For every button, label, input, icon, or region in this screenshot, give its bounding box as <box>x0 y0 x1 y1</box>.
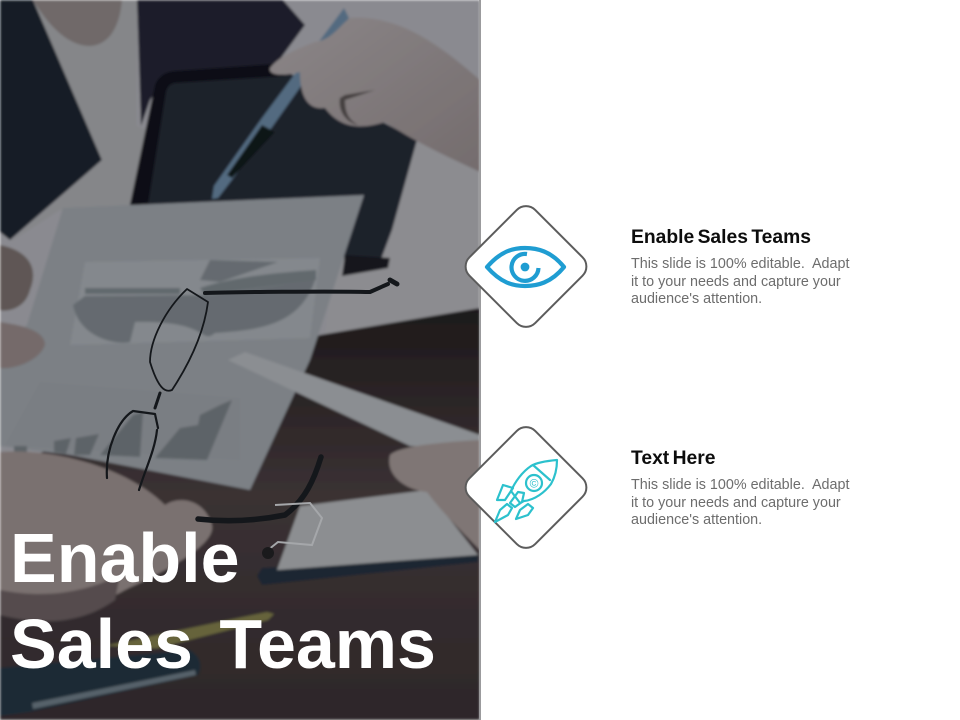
diamond frame <box>460 201 592 332</box>
laptop <box>130 64 417 270</box>
neck <box>33 0 122 46</box>
right hand lower <box>389 440 480 550</box>
right desk surface <box>325 130 480 335</box>
bar chart panel <box>5 382 240 460</box>
paper <box>0 195 364 490</box>
divider line at photo edge <box>479 0 481 720</box>
icon: rocket in diamond <box>464 426 588 549</box>
receipt strip <box>228 352 480 450</box>
heading: Enable Sales Teams <box>631 227 811 248</box>
suit left <box>0 0 102 240</box>
suit right <box>137 0 305 126</box>
text block: enable sales teams <box>631 227 850 307</box>
title: Enable <box>10 519 240 597</box>
left hand lower <box>0 452 212 612</box>
left hand top <box>0 322 45 368</box>
clipboard <box>257 555 478 585</box>
pencil <box>85 612 274 664</box>
title <box>10 519 436 683</box>
icon: eye in diamond <box>464 205 588 328</box>
pie chart <box>70 258 320 345</box>
dark table <box>0 308 480 720</box>
rocket glyph: © <box>530 476 539 490</box>
upper right hand <box>270 18 480 172</box>
clipboard clip <box>263 503 322 558</box>
heading: Text Here <box>631 448 715 469</box>
phone <box>0 640 185 695</box>
title: Sales Teams <box>10 605 436 683</box>
text block: text here <box>631 448 850 528</box>
glasses <box>107 280 397 521</box>
panel: darkened meeting photo <box>0 0 479 720</box>
pen <box>212 8 349 199</box>
eye glyph <box>487 248 564 286</box>
diamond frame <box>460 422 592 553</box>
body text: This slide is 100% editable. Adapt it to your needs and capture your audience's attention. <box>631 256 849 307</box>
shirt <box>10 0 148 242</box>
body text: This slide is 100% editable. Adapt it to your needs and capture your audience's attention. <box>631 477 849 528</box>
